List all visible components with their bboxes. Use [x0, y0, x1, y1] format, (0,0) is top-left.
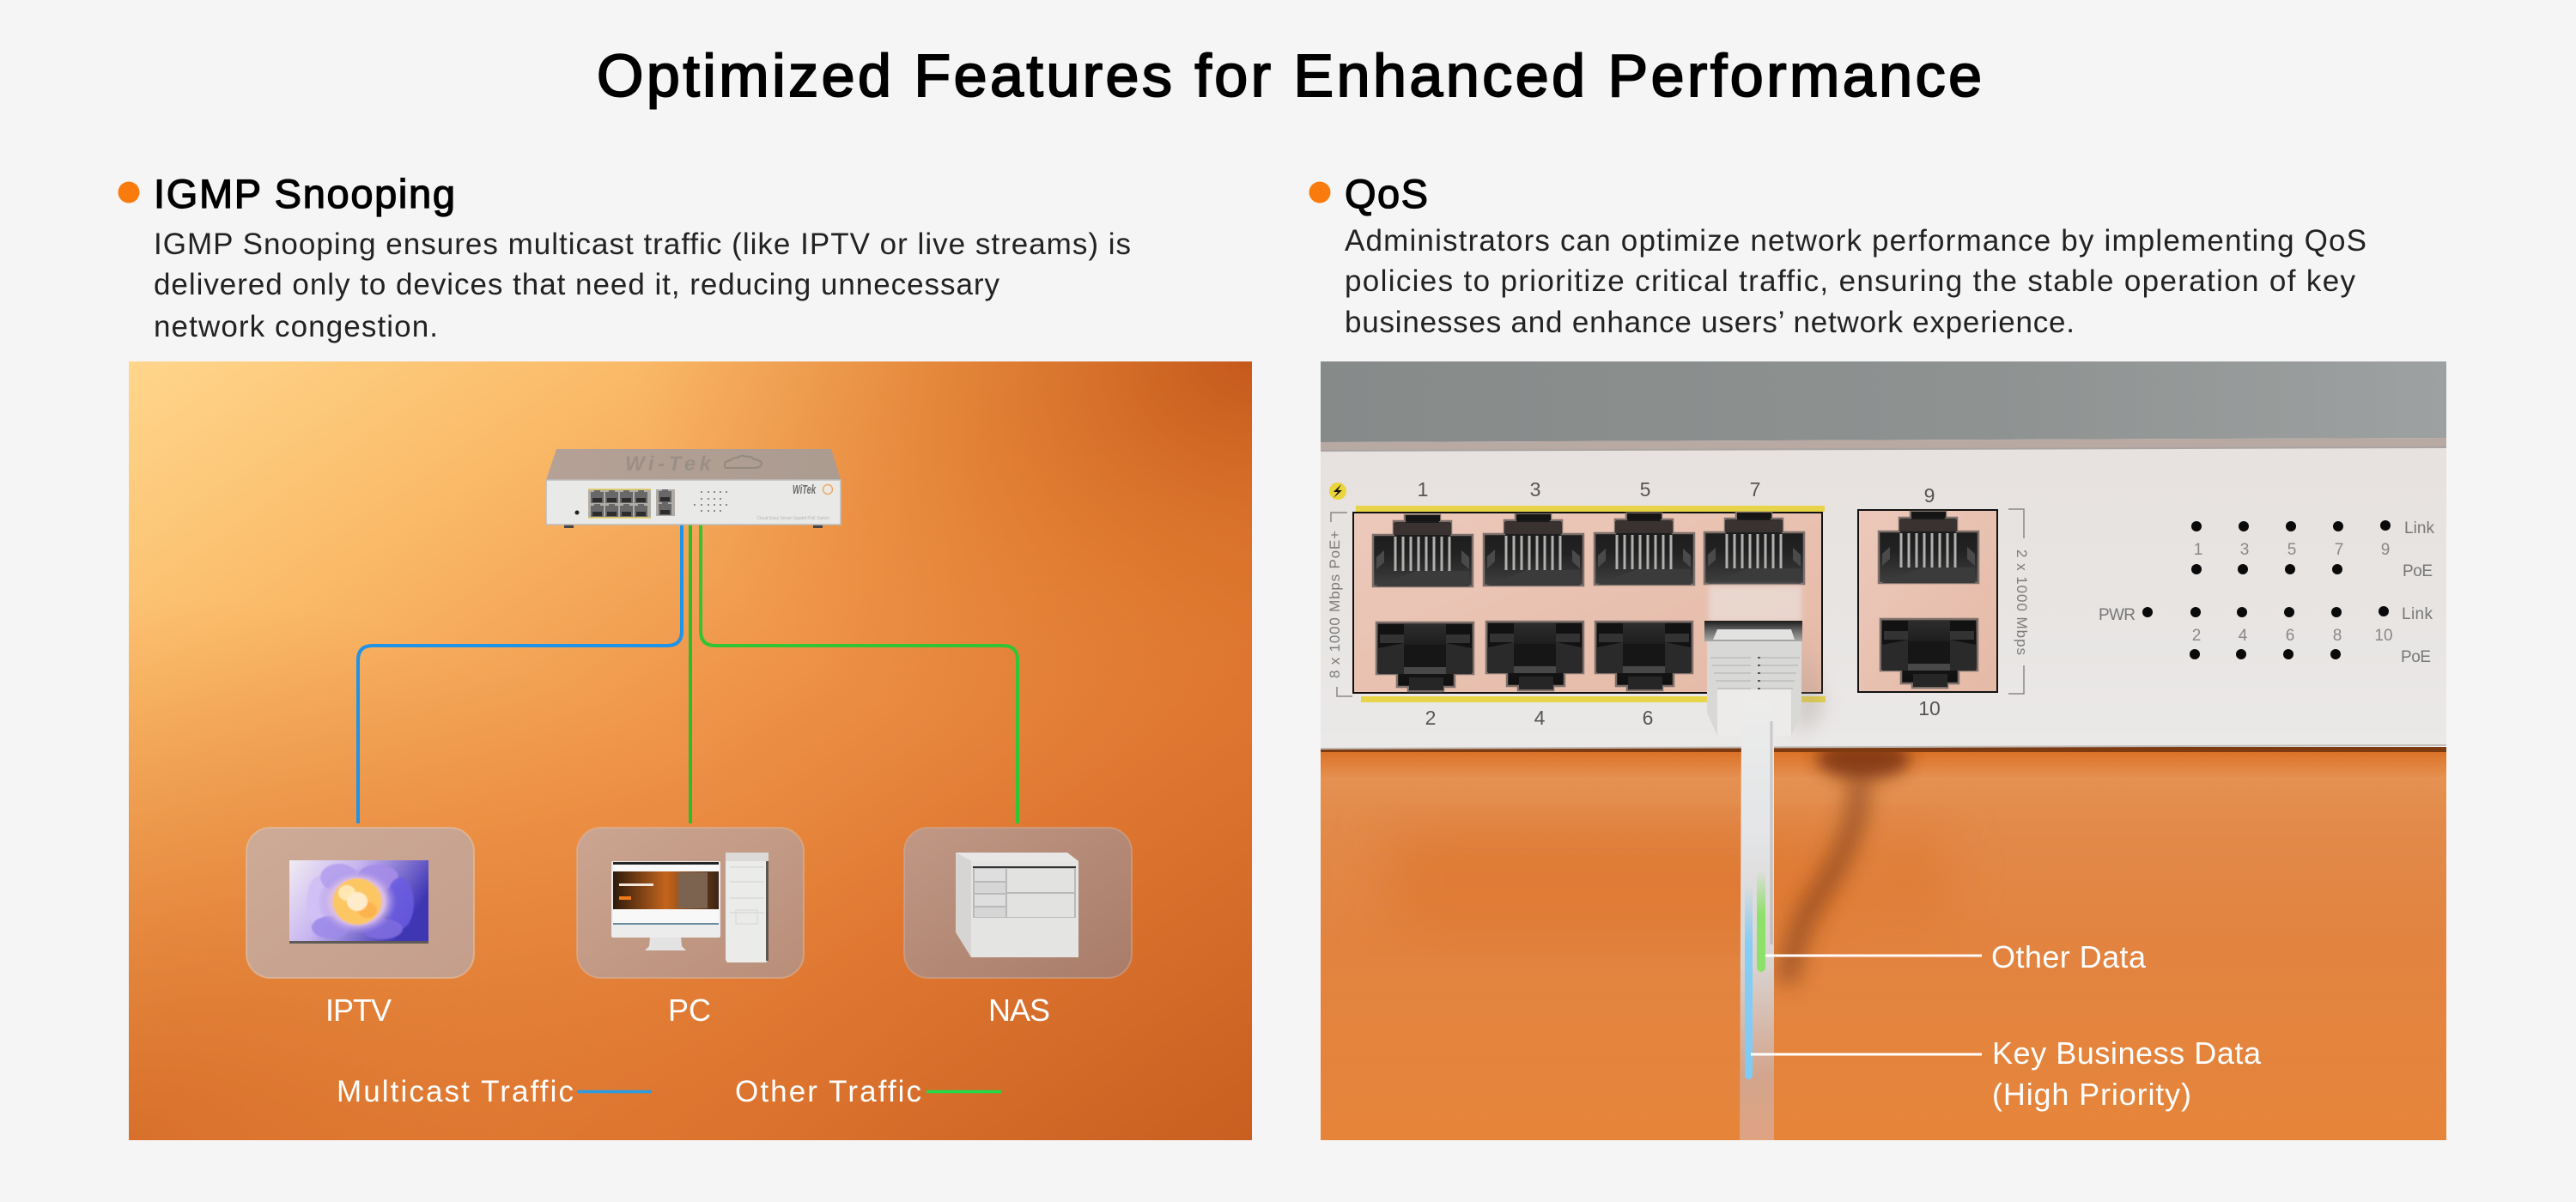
LED indicators: 6	[2286, 627, 2294, 645]
blurred port reflections	[1391, 833, 1941, 927]
LED indicators: 1	[2194, 541, 2202, 559]
port numbers: 10	[1918, 697, 1941, 719]
icon: network switch: WiTek	[793, 483, 816, 497]
panel: IGMP snooping diagram	[129, 361, 1252, 1140]
label: IPTV: IPTV	[325, 993, 392, 1028]
description: IGMP Snooping ensures multicast traffic (like IPTV or live streams) is	[154, 228, 1131, 261]
icon: PoE lightning badge	[1329, 483, 1346, 500]
icon: RJ45 plug	[1704, 621, 1802, 736]
LED indicators: 4	[2239, 627, 2248, 645]
plug shadow	[1795, 658, 1827, 733]
legend: other traffic: Other Traffic	[735, 1075, 921, 1108]
vertical label: 8 x 1000 Mbps PoE+: 8 x 1000 Mbps PoE+	[1327, 531, 1343, 678]
LED indicators: PoE	[2401, 648, 2431, 666]
LED indicators	[2099, 519, 2435, 666]
switch front panel	[1321, 447, 2446, 749]
section: IGMP Snooping text	[118, 171, 1131, 343]
heading: IGMP Snooping: IGMP Snooping	[154, 171, 455, 216]
port block 9-10	[1858, 510, 1997, 692]
cable	[1740, 700, 1774, 1140]
description	[154, 228, 1131, 343]
description: delivered only to devices that need it, reducing unnecessary	[154, 268, 999, 301]
port numbers: 2	[1425, 707, 1436, 729]
label: NAS: NAS	[988, 993, 1050, 1028]
port numbers: 3	[1530, 478, 1540, 501]
description: Administrators can optimize network performance by implementing QoS	[1345, 224, 2366, 258]
section: QoS text	[1309, 171, 2366, 339]
card: PC	[577, 828, 804, 978]
port group brackets	[1331, 509, 2024, 696]
connection: other traffic line to NAS	[701, 525, 1018, 823]
connection: multicast line to IPTV	[358, 525, 682, 823]
port numbers: 6	[1643, 707, 1653, 729]
bullet	[1309, 182, 1331, 203]
title: Optimized Features for Enhanced Performance	[597, 42, 1982, 109]
description: businesses and enhance users’ network experience.	[1345, 306, 2075, 339]
port block 1-8	[1353, 513, 1822, 693]
port numbers: 4	[1534, 707, 1546, 729]
LED indicators: PWR	[2099, 606, 2136, 624]
port numbers: 7	[1750, 478, 1760, 501]
callout: other data: Other Data	[1991, 939, 2147, 974]
callout: key business data	[1751, 1035, 2262, 1112]
LED indicators: 8	[2333, 627, 2342, 645]
LED indicators: 7	[2335, 541, 2343, 559]
plug blur above connector	[1709, 586, 1801, 622]
description	[1345, 224, 2366, 339]
icon: network switch	[546, 449, 841, 528]
card: NAS	[904, 828, 1132, 978]
port numbers: 9	[1924, 484, 1935, 507]
other data signal	[1757, 870, 1765, 972]
panel: QoS switch photo	[1321, 361, 2446, 1140]
icon: tower	[726, 853, 769, 962]
port numbers: 1	[1418, 478, 1428, 501]
port numbers	[1418, 478, 1941, 729]
icon: network switch: Cloud Easy Smart Gigabit PoE Switch	[757, 516, 829, 521]
icon: monitor	[611, 861, 720, 950]
heading: QoS: QoS	[1345, 171, 1428, 216]
card: IPTV	[246, 828, 474, 978]
callout: key business data: Key Business Data	[1992, 1035, 2262, 1071]
callout: key business data: (High Priority)	[1992, 1077, 2191, 1112]
bullet	[118, 182, 139, 203]
LED indicators: 5	[2287, 541, 2296, 559]
cable shadow on surface	[1786, 777, 1859, 983]
key business data signal	[1745, 884, 1753, 1079]
LED indicators: Link	[2402, 605, 2433, 623]
grey switch top	[1321, 361, 2446, 442]
port numbers: 5	[1640, 478, 1650, 501]
icon: TV	[289, 860, 428, 944]
connection: other traffic line to PC	[689, 525, 692, 823]
LED indicators: 3	[2240, 541, 2249, 559]
LED indicators: 9	[2381, 541, 2390, 559]
top edge strip	[1321, 438, 2446, 450]
label: PC: PC	[668, 993, 711, 1028]
vertical label: 2 x 1000 Mbps: 2 x 1000 Mbps	[2014, 549, 2030, 655]
LED indicators: 2	[2192, 627, 2201, 645]
dark shadow under switch	[1816, 738, 1911, 780]
LED indicators: Link	[2404, 519, 2435, 537]
orange surface	[1321, 747, 2446, 1140]
description: network congestion.	[154, 310, 438, 343]
description: policies to prioritize critical traffic, ensuring the stable operation of key	[1345, 264, 2356, 298]
icon: network switch: Wi-Tek	[625, 452, 713, 476]
icon: NAS	[956, 853, 1078, 957]
LED indicators: PoE	[2403, 562, 2433, 580]
legend: multicast traffic: Multicast Traffic	[337, 1075, 574, 1108]
LED indicators: 10	[2374, 627, 2393, 645]
yellow port markers	[1356, 506, 1826, 702]
